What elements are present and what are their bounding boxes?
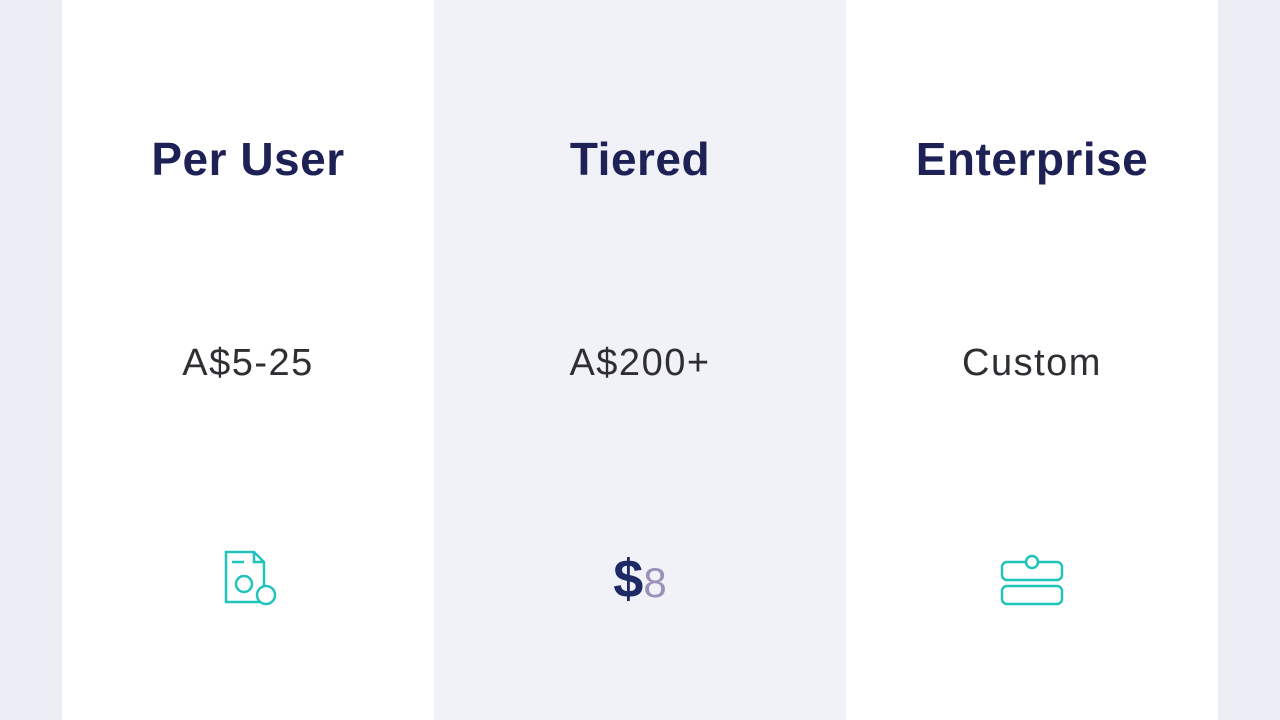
heading: per user: Per User bbox=[151, 133, 345, 185]
icon: server bbox=[1000, 554, 1064, 606]
price: tiered: A$200+ bbox=[569, 342, 711, 384]
icon: dollar: $8 bbox=[613, 549, 667, 609]
price: per user: A$5-25 bbox=[182, 342, 314, 384]
panel: per user bbox=[62, 0, 434, 720]
heading: enterprise: Enterprise bbox=[916, 133, 1148, 185]
icon: document bbox=[224, 550, 276, 606]
panel: tiered bbox=[434, 0, 846, 720]
panel: enterprise bbox=[846, 0, 1218, 720]
price: enterprise: Custom bbox=[962, 342, 1102, 384]
heading: tiered: Tiered bbox=[570, 133, 710, 185]
